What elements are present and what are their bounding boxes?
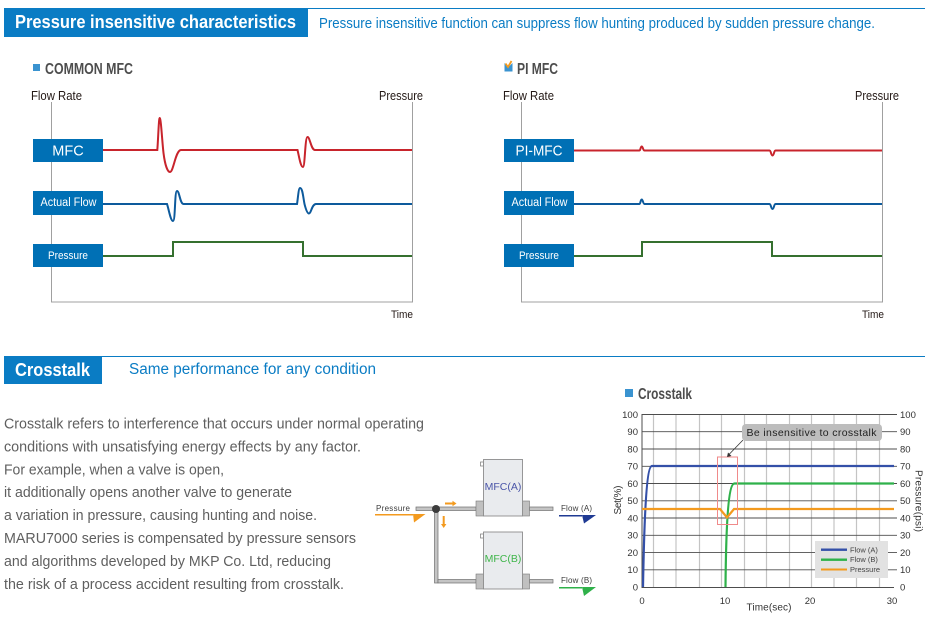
label: pressure [504,244,574,267]
label: pressure [33,244,103,267]
label: MFC: MFC [52,144,84,160]
arrow: pressure in: Pressure [376,504,411,513]
arrow: flow A out [559,504,596,524]
heading: PI MFC [504,61,558,78]
vertical grid [654,414,880,587]
axes frame [52,102,412,302]
text block: crosstalk description [4,416,424,593]
series: pressure [642,509,894,518]
x axis labels: 10 [720,596,730,607]
series: flow A [643,466,894,587]
right y axis labels: 30 [900,530,911,542]
red MFC trace [103,118,412,172]
x axis labels: 0 [639,596,645,607]
arrow: callout pointer [727,440,743,457]
heading: crosstalk chart [625,386,692,403]
blue actual flow trace [574,200,882,209]
x axis labels: 20 [805,596,815,607]
chart: crosstalk line chart [613,410,924,614]
junction node [432,505,440,513]
x axis labels [639,596,897,607]
label: PI-MFC: PI-MFC [516,144,562,160]
blue actual flow trace [103,188,412,221]
axis label: flow rate: Flow Rate [503,89,554,103]
green pressure trace [574,242,882,256]
right y axis labels: 50 [900,496,911,507]
axis label: pressure: Pressure [379,89,423,103]
right y axis labels: 60 [900,479,911,490]
legend [815,541,888,578]
axis title: time: Time(sec) [746,602,792,614]
panel: common MFC chart [31,61,423,321]
section header: pressure insensitive characteristics [4,8,925,37]
legend: Flow (A) [850,546,878,554]
text block: crosstalk description: the risk of a process accident resulting from crosstalk. [4,576,344,593]
legend: Flow (B) [850,555,878,564]
diagram: MFC piping [375,460,596,596]
text block: crosstalk description: For example, when a valve is open, [4,462,224,478]
left y axis labels: 70 [627,462,638,472]
arrow: flow B out: Flow (B) [561,576,592,585]
arrow: orange down [441,516,446,528]
plot axes [642,414,894,588]
left y axis labels: 30 [627,530,638,542]
text block: crosstalk description: MARU7000 series is compensated by pressure sensors [4,530,356,547]
label: actual flow: Actual Flow [40,197,97,209]
left y axis labels: 60 [627,479,638,490]
right y axis labels: 10 [900,565,911,576]
label: actual flow [33,191,103,215]
left y axis labels: 0 [633,582,638,594]
label: actual flow: Actual Flow [512,197,568,209]
text block: crosstalk description: it additionally opens another valve to generate [4,484,292,501]
arrow: orange right [445,501,456,506]
left y axis labels: 90 [627,427,638,438]
series: flow B [726,484,894,587]
green pressure trace [103,242,412,256]
left y axis labels: 20 [627,548,638,559]
left y axis labels [622,410,638,594]
legend: Pressure [850,565,880,574]
panel: PI MFC chart [503,61,899,321]
left y axis labels: 10 [627,565,638,576]
x axis labels: 30 [887,596,897,607]
label: MFC [33,139,103,162]
axis label: time: Time [391,309,413,321]
left y axis labels: 100 [622,410,638,421]
callout: be insensitive to crosstalk: Be insensitive to crosstalk [746,427,877,439]
unit: MFC(A): MFC(A) [485,481,521,493]
label: PI-MFC [504,139,574,162]
section header: crosstalk: Crosstalk [15,360,91,380]
right y axis labels: 80 [900,444,911,456]
icon: check mark badge [504,61,512,72]
arrow: flow A out: Flow (A) [561,504,592,513]
arrow: pressure in [375,504,426,522]
section header: pressure insensitive characteristics: Pressure insensitive characteristics [15,12,296,32]
text block: crosstalk description: and algorithms developed by MKP Co. Ltd, reducing [4,553,331,570]
axes frame [522,102,882,302]
left y axis labels: 80 [627,444,638,456]
unit: MFC(B): MFC(B) [485,553,521,565]
right y axis labels: 20 [900,548,911,559]
right y axis labels: 0 [900,582,905,594]
red PI-MFC trace [574,146,882,156]
arrow: flow B out [559,576,596,596]
callout: be insensitive to crosstalk [742,424,882,441]
unit: MFC(B) [476,532,530,589]
highlight box [718,457,738,524]
axis label: flow rate: Flow Rate [31,89,82,103]
heading: common MFC: COMMON MFC [45,61,133,78]
text block: crosstalk description: a variation in pressure, causing hunting and noise. [4,507,317,524]
right y axis labels: 100 [900,410,916,421]
section header: pressure insensitive characteristics: Pressure insensitive function can suppress flow hunting produced by sudden pressure change. [319,16,875,32]
label: pressure: Pressure [519,250,559,262]
label: actual flow [504,191,574,215]
horizontal grid [642,414,897,570]
text block: crosstalk description: conditions with unsatisfying energy effects by any factor. [4,438,361,456]
left y axis labels: 40 [627,514,638,524]
axis title: set: Set(%) [613,486,624,514]
axis title: pressure: Pressure(psi) [912,470,924,532]
unit: MFC(A) [476,460,530,516]
axis label: time: Time [862,309,884,321]
right y axis labels: 40 [900,514,911,524]
heading: PI MFC: PI MFC [517,61,558,78]
left y axis labels: 50 [627,496,638,507]
label: pressure: Pressure [48,250,88,262]
heading: crosstalk chart: Crosstalk [638,386,692,403]
right y axis labels: 70 [900,462,911,472]
section header: crosstalk [4,356,925,384]
section header: crosstalk: Same performance for any condition [129,361,376,378]
right y axis labels [900,410,916,594]
text block: crosstalk description: Crosstalk refers to interference that occurs under normal operating [4,416,424,432]
right y axis labels: 90 [900,427,911,438]
pipes [416,507,553,583]
axis label: pressure: Pressure [855,89,899,103]
